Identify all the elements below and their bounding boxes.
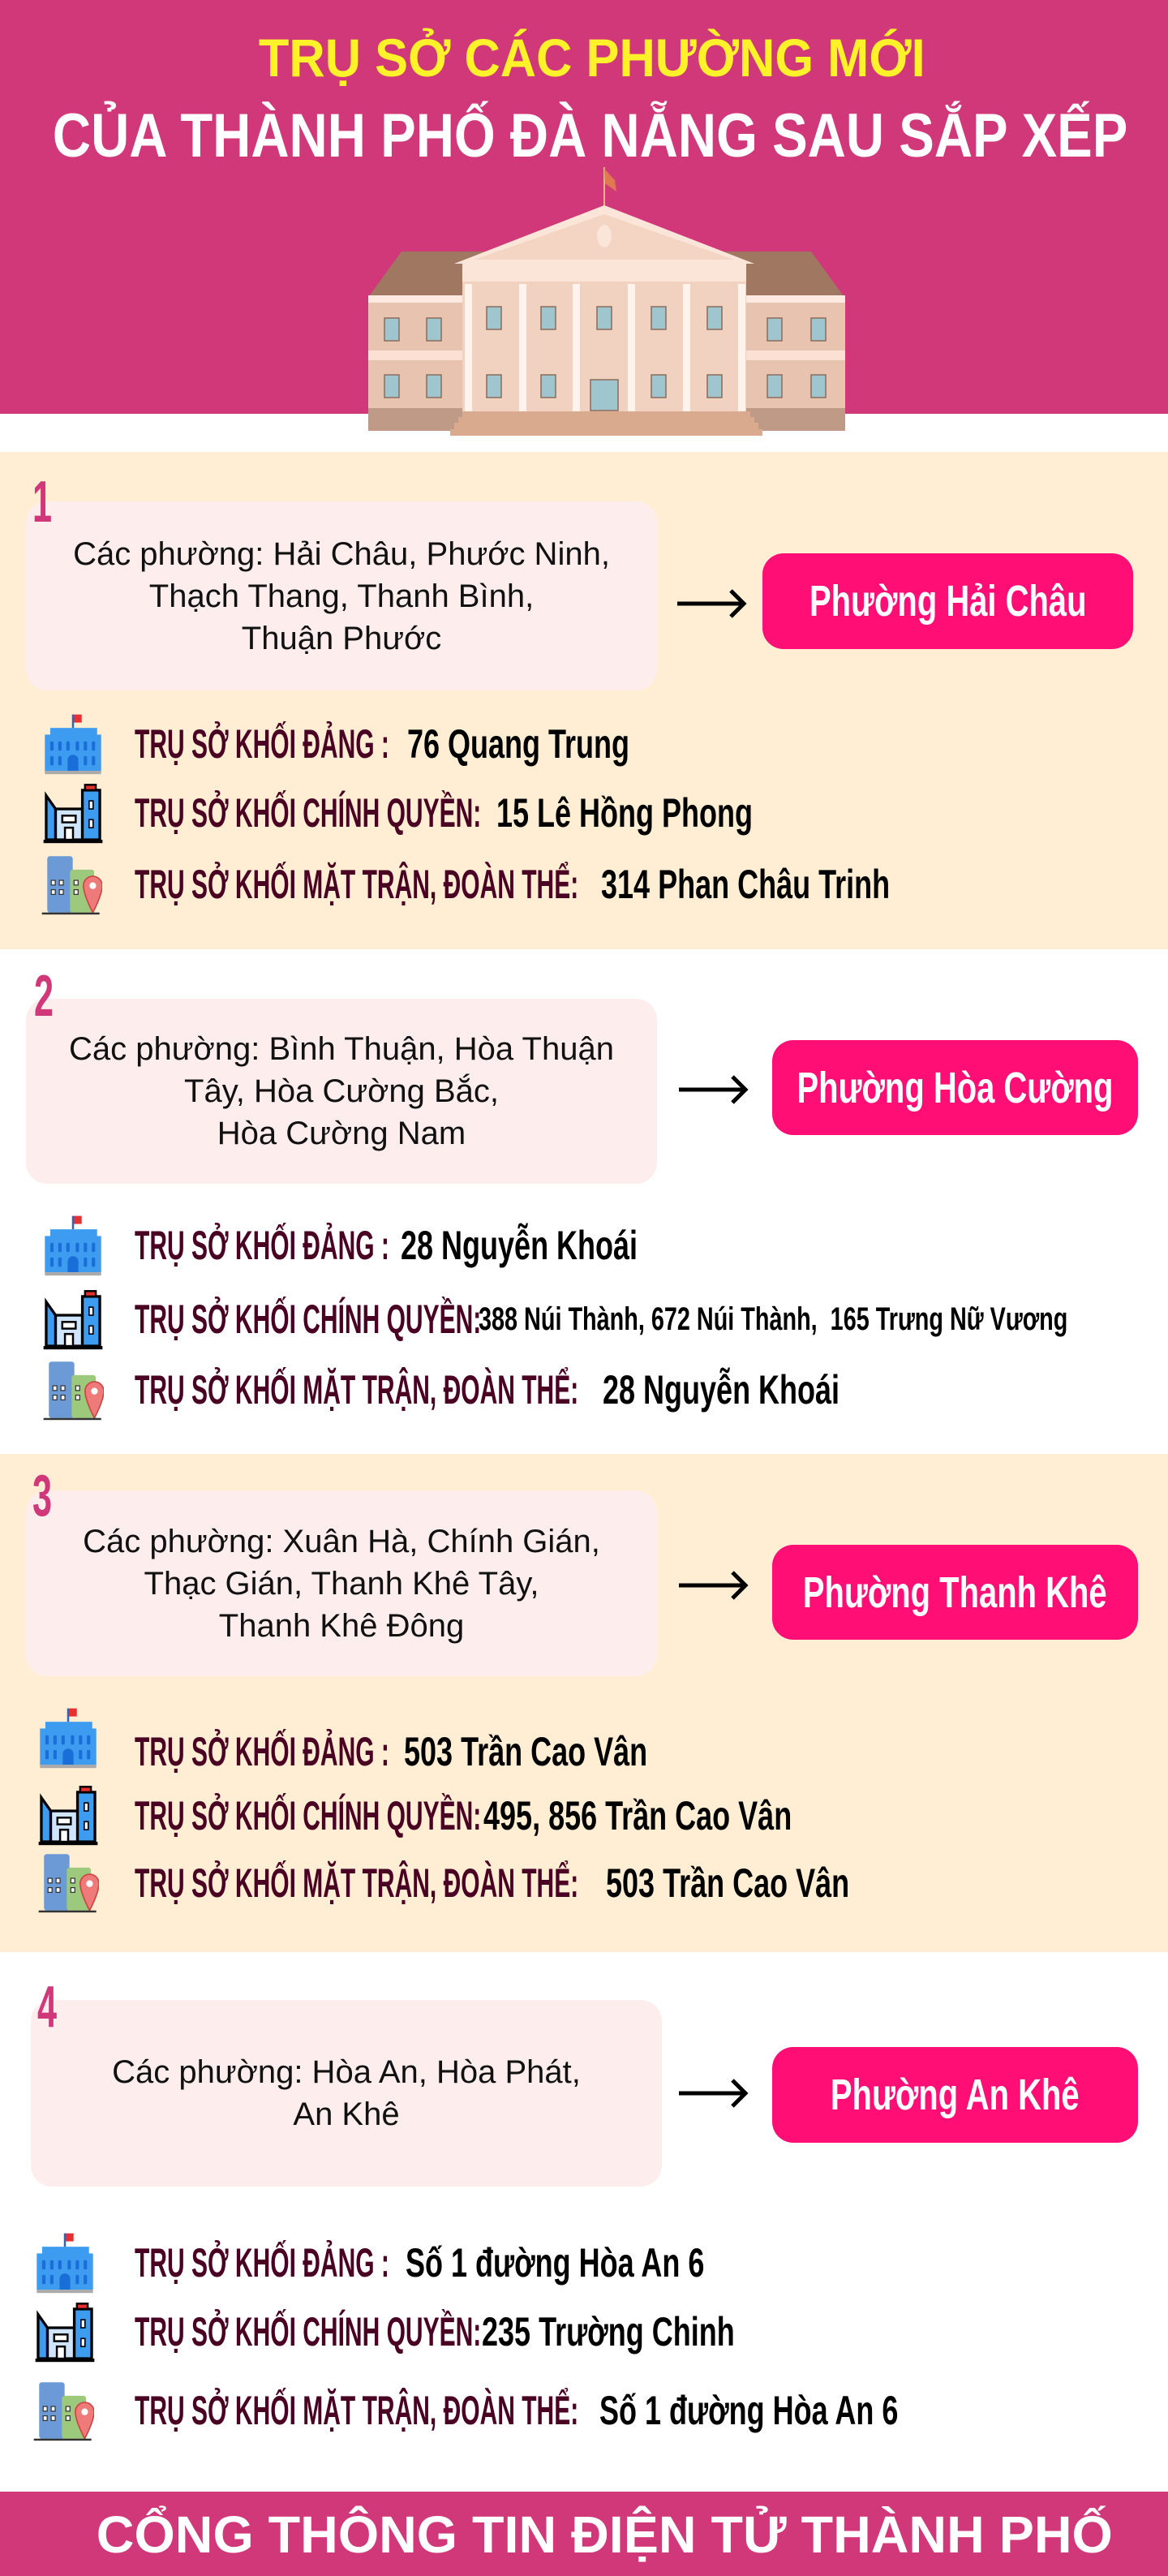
- merged wards box: [26, 501, 657, 690]
- panel: section 2: 388 Núi Thành, 672 Núi Thành, 165 Trưng Nữ Vương: [479, 1301, 1067, 1337]
- merged wards box: Hòa Cường Nam: [217, 1116, 466, 1151]
- icon: party building: [45, 1215, 101, 1275]
- panel: section 1: TRỤ SỞ KHỐI CHÍNH QUYỀN:: [135, 790, 481, 836]
- new ward button: Phường Hòa Cường: [797, 1063, 1113, 1112]
- merged wards box: [31, 2000, 662, 2187]
- footer text: CỔNG THÔNG TIN ĐIỆN TỬ THÀNH PHỐ: [96, 2505, 1113, 2564]
- row: government HQ: [135, 1793, 792, 1838]
- icon: front buildings with pin: [34, 2382, 94, 2441]
- merged wards box: Thanh Khê Đông: [219, 1608, 464, 1644]
- panel: section 1: 314 Phan Châu Trinh: [601, 862, 890, 907]
- merged wards box: [26, 999, 657, 1184]
- panel: section 4: TRỤ SỞ KHỐI CHÍNH QUYỀN:: [135, 2309, 481, 2355]
- merged wards box: [26, 1490, 657, 1676]
- row: party HQ: [135, 720, 629, 767]
- panel: section 2: TRỤ SỞ KHỐI ĐẢNG :: [135, 1223, 389, 1268]
- panel: section 3: 503 Trần Cao Vân: [606, 1860, 849, 1906]
- icon: party building: [40, 1709, 97, 1769]
- panel: section 4: TRỤ SỞ KHỐI MẶT TRẬN, ĐOÀN THỂ:: [135, 2388, 578, 2433]
- panel: section 2: 28 Nguyễn Khoái: [401, 1223, 638, 1268]
- panel: section 1: 15 Lê Hồng Phong: [496, 790, 753, 836]
- panel: section 2: 28 Nguyễn Khoái: [603, 1367, 840, 1413]
- icon: front buildings with pin: [44, 1361, 104, 1420]
- panel: section 2: TRỤ SỞ KHỐI CHÍNH QUYỀN:: [135, 1297, 481, 1342]
- number 4: 4: [37, 1975, 57, 2040]
- icon: front buildings with pin: [39, 1854, 99, 1913]
- new ward button: [772, 1040, 1138, 1135]
- icon: party building: [36, 2233, 93, 2293]
- arrow: [679, 2079, 748, 2108]
- title line 1: TRỤ SỞ CÁC PHƯỜNG MỚI: [259, 28, 925, 88]
- illustration: city hall building: [368, 167, 845, 436]
- new ward button: Phường An Khê: [831, 2071, 1080, 2119]
- panel: section 2: TRỤ SỞ KHỐI MẶT TRẬN, ĐOÀN THỂ:: [135, 1367, 578, 1413]
- icon: front buildings with pin: [42, 856, 102, 915]
- footer band: [0, 2492, 1168, 2576]
- row: party HQ: [135, 1728, 647, 1774]
- number 2: 2: [34, 964, 54, 1029]
- number 1: 1: [32, 470, 52, 535]
- arrow: [677, 589, 746, 618]
- merged wards box: Thạc Gián, Thanh Khê Tây,: [144, 1566, 539, 1602]
- row: government HQ: [135, 1297, 1067, 1342]
- row: front HQ: [135, 1367, 840, 1413]
- new ward button: [762, 553, 1133, 649]
- panel: section 3: TRỤ SỞ KHỐI CHÍNH QUYỀN:: [135, 1793, 481, 1838]
- row: front HQ: [135, 1860, 849, 1906]
- icon: government building: [44, 1290, 102, 1350]
- icon: government building: [36, 2303, 94, 2363]
- panel: section 4: TRỤ SỞ KHỐI ĐẢNG :: [135, 2240, 389, 2286]
- panel: section 4: [0, 1952, 1168, 2492]
- title line 2: CỦA THÀNH PHỐ ĐÀ NẴNG SAU SẮP XẾP: [53, 101, 1127, 170]
- header band: [0, 0, 1168, 414]
- row: government HQ: [135, 790, 753, 836]
- icon: government building: [44, 784, 102, 844]
- panel: section 4: 235 Trường Chinh: [482, 2309, 735, 2355]
- new ward button: Phường Thanh Khê: [803, 1568, 1107, 1616]
- panel: section 1: TRỤ SỞ KHỐI MẶT TRẬN, ĐOÀN THỂ:: [135, 862, 578, 907]
- icon: party building: [45, 714, 101, 774]
- new ward button: [772, 1545, 1138, 1640]
- panel: section 3: TRỤ SỞ KHỐI ĐẢNG :: [135, 1729, 389, 1774]
- merged wards box: Các phường: Xuân Hà, Chính Gián,: [83, 1524, 600, 1559]
- panel: section 1: TRỤ SỞ KHỐI ĐẢNG :: [135, 721, 389, 767]
- merged wards box: Thạch Thang, Thanh Bình,: [149, 578, 534, 613]
- panel: section 1: [0, 452, 1168, 949]
- new ward button: [772, 2047, 1138, 2143]
- arrow: [679, 1075, 748, 1104]
- row: government HQ: [135, 2309, 735, 2355]
- panel: section 2: [0, 949, 1168, 1454]
- panel: section 3: 495, 856 Trần Cao Vân: [483, 1793, 792, 1838]
- row: party HQ: [135, 1222, 638, 1268]
- icon: government building: [39, 1786, 97, 1845]
- merged wards box: Tây, Hòa Cường Bắc,: [184, 1073, 499, 1109]
- merged wards box: Các phường: Bình Thuận, Hòa Thuận: [69, 1031, 614, 1067]
- merged wards box: Các phường: Hòa An, Hòa Phát,: [112, 2054, 581, 2090]
- panel: section 4: Số 1 đường Hòa An 6: [406, 2240, 704, 2286]
- new ward button: Phường Hải Châu: [809, 577, 1086, 626]
- merged wards box: Thuận Phước: [242, 620, 441, 656]
- panel: section 1: 76 Quang Trung: [407, 721, 629, 767]
- row: front HQ: [135, 862, 890, 907]
- merged wards box: Các phường: Hải Châu, Phước Ninh,: [73, 535, 610, 571]
- panel: section 3: [0, 1454, 1168, 1952]
- row: party HQ: [135, 2239, 704, 2286]
- number 3: 3: [32, 1464, 52, 1529]
- panel: section 4: Số 1 đường Hòa An 6: [599, 2388, 898, 2433]
- row: front HQ: [135, 2388, 898, 2433]
- arrow: [679, 1571, 748, 1600]
- panel: section 3: 503 Trần Cao Vân: [404, 1729, 647, 1774]
- merged wards box: An Khê: [293, 2096, 400, 2132]
- panel: section 3: TRỤ SỞ KHỐI MẶT TRẬN, ĐOÀN THỂ:: [135, 1860, 578, 1906]
